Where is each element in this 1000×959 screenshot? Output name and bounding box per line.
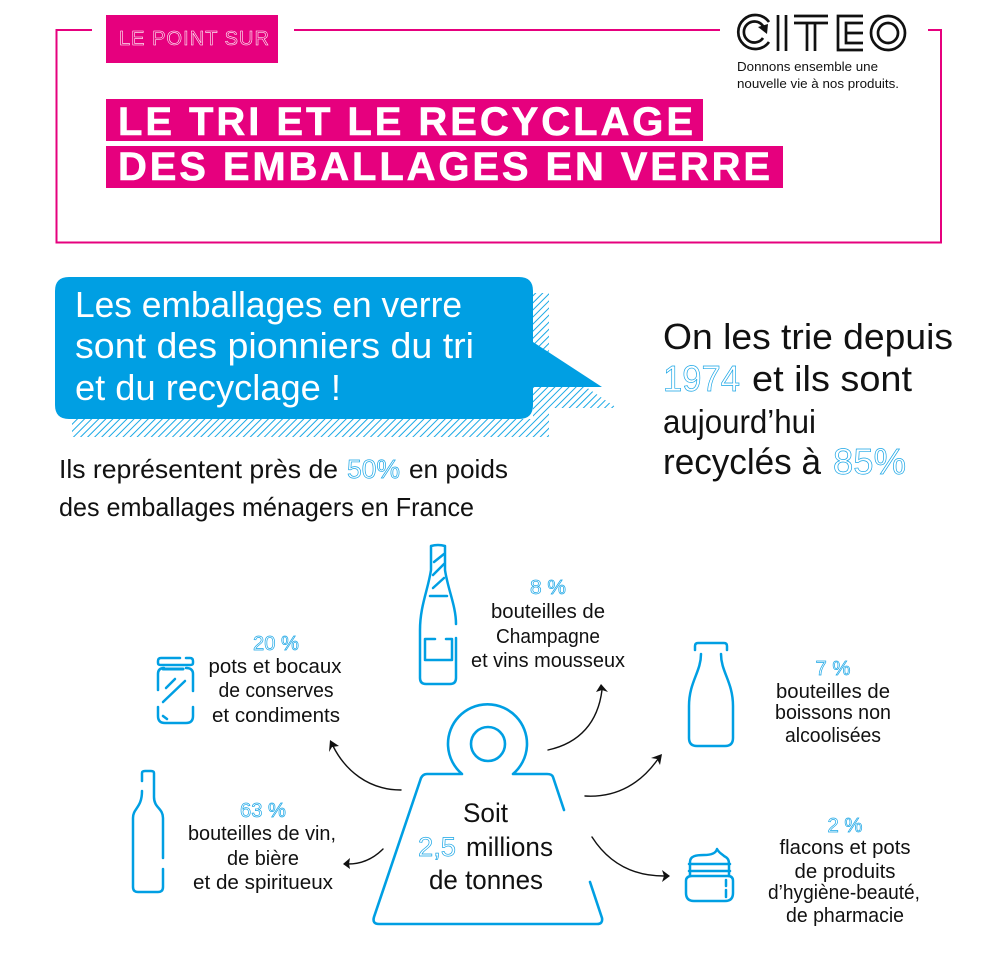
text: 8% [471,577,625,672]
arrow: to 2% [592,837,670,882]
text: 7%: alcoolisées [785,725,881,747]
bubble text: Les emballages en verre [75,284,462,325]
text: 2% [768,815,920,927]
weight text: de tonnes [429,865,543,895]
text: 2%: flacons et pots [780,837,910,859]
text: 7%: bouteilles de [776,681,890,703]
title: DES EMBALLAGES EN VERRE [118,145,770,189]
tag: le point sur [106,15,278,63]
text: 8%: 8 % [530,577,566,599]
text: 2%: d’hygiène-beauté, [768,882,920,904]
arrow: to 7% [585,754,662,796]
weight: 2,5 millions de tonnes [374,704,602,924]
text: 7%: boissons non [775,702,891,724]
text: 63% [188,800,336,894]
text: 50% en poids: 50% [347,454,400,484]
icon: champagne bottle [420,545,456,684]
text: 63%: et de spiritueux [193,872,333,894]
logo: citeo: Donnons ensemble une [737,59,878,74]
text: 20%: de conserves [218,680,334,702]
text: trié depuis 1974, recyclés à 85%: 1974 [663,358,740,399]
item: 63% vin [133,771,336,894]
text: 50% en poids [59,454,508,522]
weight text: 2,5 [418,832,456,862]
text: 20% [208,633,342,727]
bubble shape [55,277,602,419]
text: 2%: 2 % [828,815,863,837]
bubble text: sont des pionniers du tri [75,325,474,366]
text: 20%: pots et bocaux [208,656,342,678]
title: LE TRI ET LE RECYCLAGE [118,100,693,144]
text: 63%: bouteilles de vin, [188,823,336,845]
text: trié depuis 1974, recyclés à 85%: aujourd’hui [663,403,816,440]
logo: citeo [737,15,905,91]
text: trié depuis 1974, recyclés à 85% [663,316,953,482]
text: 8%: et vins mousseux [471,650,625,672]
weight text [418,798,553,895]
icon: wine bottle [133,771,163,892]
text: 50% en poids: Ils représentent près de [59,454,338,484]
text: 63%: 63 % [240,800,286,822]
text: trié depuis 1974, recyclés à 85%: recyclés à [663,441,822,482]
text: 63%: de bière [227,848,299,870]
text: 2%: de pharmacie [786,905,904,927]
text: 7%: 7 % [816,658,851,680]
item: 2% flacons [686,815,920,927]
item: 7% boissons [689,643,891,747]
speech bubble [55,277,617,437]
text: 20%: et condiments [212,705,340,727]
text: 2%: de produits [794,861,896,883]
icon: milk bottle [689,643,733,746]
arrow: to 63% [343,849,383,869]
text: 50% en poids: en poids [409,454,508,484]
text: 20%: 20 % [253,633,299,655]
header frame [56,30,941,242]
bubble hatched shadow [72,293,617,437]
bubble text: et du recyclage ! [75,367,341,408]
weight outline [374,704,602,924]
text: trié depuis 1974, recyclés à 85%: et ils sont [752,358,912,399]
icon: cream jar [686,849,733,901]
header panel [56,15,941,242]
weight text: millions [466,832,553,862]
weight text: Soit [463,798,508,828]
text: 7% [775,658,891,747]
item: 8% champagne [420,545,625,684]
icon: jar [158,658,193,723]
text: 8%: Champagne [496,626,600,648]
arrow: to 20% [329,740,401,790]
title [106,99,783,189]
item: 20% pots [158,633,342,727]
text: trié depuis 1974, recyclés à 85%: 85% [833,441,906,482]
text: trié depuis 1974, recyclés à 85%: On les trie depuis [663,316,953,357]
text: 50% en poids: des emballages ménagers en France [59,492,474,522]
tag: le point sur: LE POINT SUR [119,28,269,50]
logo: citeo: nouvelle vie à nos produits. [737,76,899,91]
bubble text [75,284,474,408]
text: 8%: bouteilles de [491,601,605,623]
arrow: to 8% [548,684,608,750]
